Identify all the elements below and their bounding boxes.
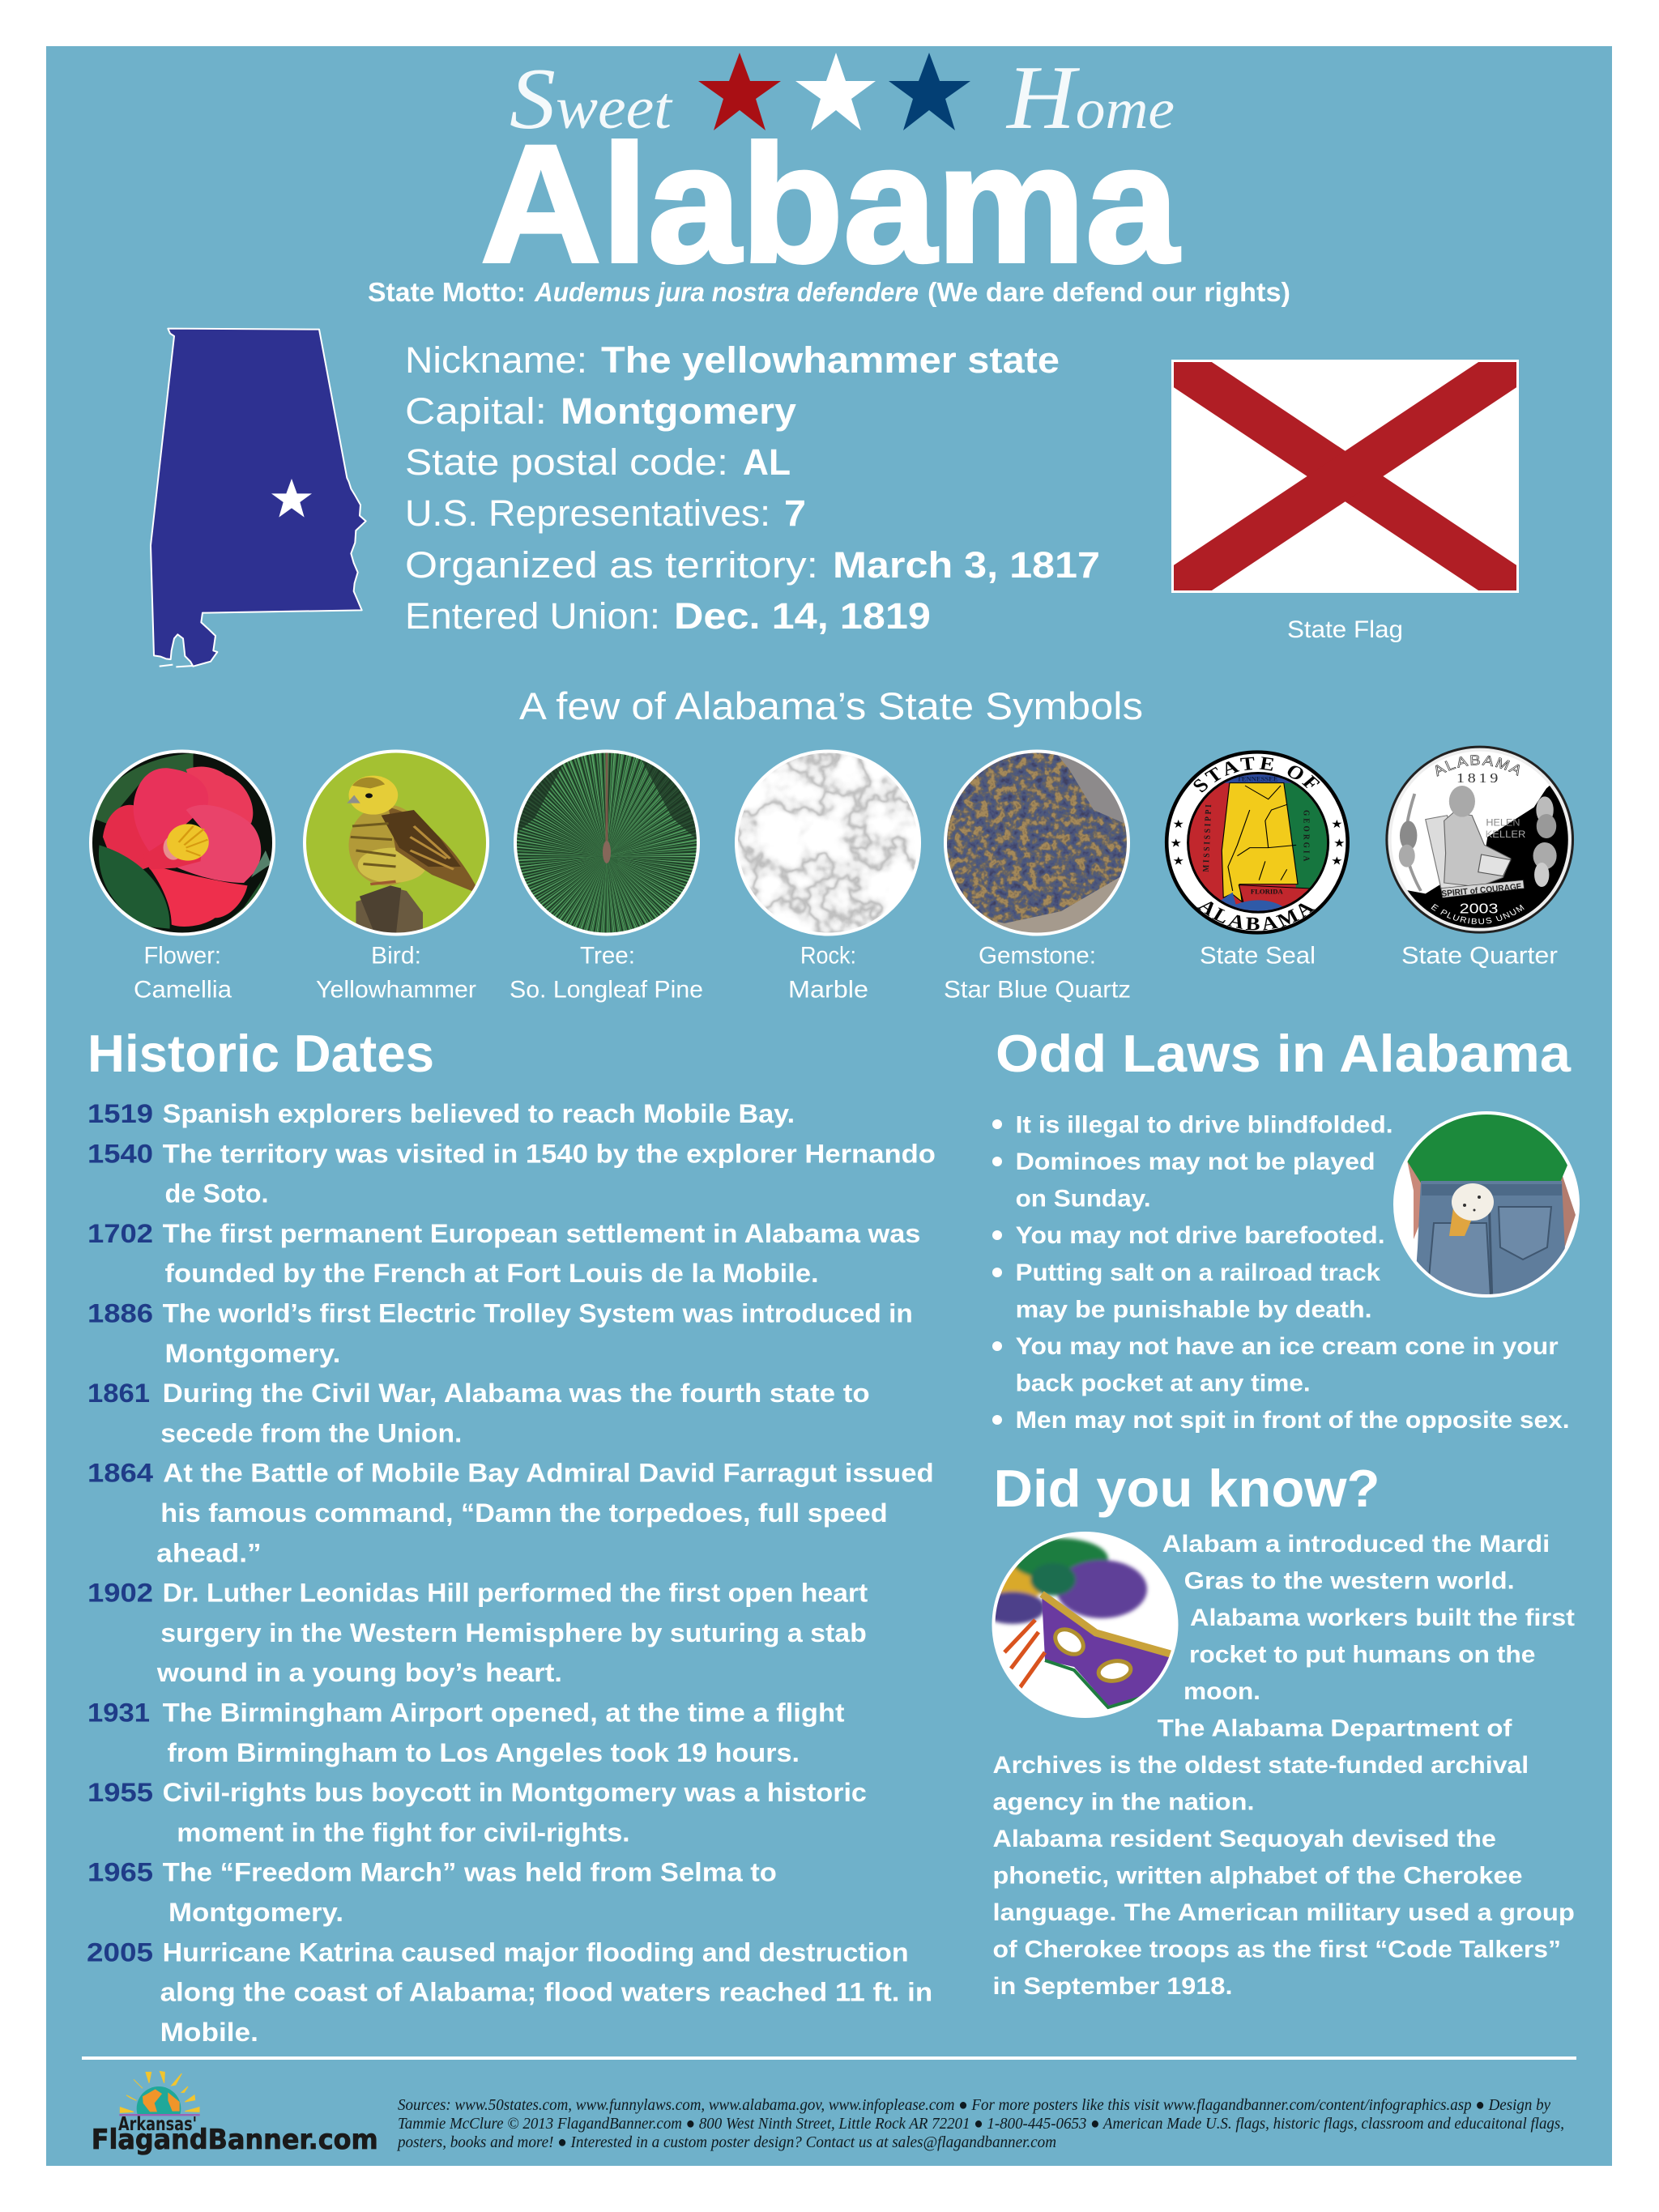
symbol: state quarter: 1819 xyxy=(1456,770,1501,786)
text: state motto: State Motto: xyxy=(368,277,526,307)
map: Alabama state outline xyxy=(151,329,366,667)
entry: 1540: The territory was visited in 1540 by the explorer Hernando xyxy=(163,1139,936,1168)
text: Sweet: Sweet xyxy=(510,51,674,147)
fact: postal code: State postal code: xyxy=(405,441,728,483)
list: odd laws bullets: on Sunday. xyxy=(1016,1186,1151,1213)
captions: state symbols: Marble xyxy=(788,977,868,1003)
captions: state symbols: State Seal xyxy=(1200,943,1316,969)
icon: white star xyxy=(795,53,876,130)
entry: 1864: At the Battle of Mobile Bay Admiral David Farragut issued xyxy=(163,1459,934,1488)
fact: capital: Montgomery xyxy=(561,390,796,432)
entry: 1702: 1702 xyxy=(87,1219,153,1248)
fact: organized as territory: Organized as territory: xyxy=(405,544,818,586)
entry: 1886: The world’s first Electric Trolley System was introduced in xyxy=(163,1299,913,1328)
entry: 2005: 2005 xyxy=(87,1937,153,1967)
symbol: state seal: ★ xyxy=(1333,837,1346,850)
symbol: state quarter: HELEN xyxy=(1486,816,1520,828)
entry: 1861 xyxy=(87,1379,870,1447)
heading: state symbols: A few of Alabama’s State Symbols xyxy=(519,684,1143,727)
list: odd laws bullets: You may not drive barefooted. xyxy=(1016,1222,1385,1249)
text block: did you know facts: agency in the nation. xyxy=(993,1788,1254,1816)
captions: state symbols: Star Blue Quartz xyxy=(944,977,1131,1003)
text block: did you know facts: Alabam a introduced the Mardi xyxy=(1162,1531,1550,1558)
symbol: yellowhammer bird photo xyxy=(303,749,489,937)
flag: Alabama state flag xyxy=(1171,360,1519,593)
entry: 1931: from Birmingham to Los Angeles took 19 hours. xyxy=(167,1738,800,1767)
symbol: state seal: GEORGIA xyxy=(1302,810,1311,862)
logo: Arkansas' FlagandBanner.com: Arkansas' xyxy=(118,2114,197,2135)
symbol: state seal: ★ xyxy=(1331,855,1342,867)
text block: did you know facts: phonetic, written alphabet of the Cherokee xyxy=(993,1863,1523,1889)
entry: 1955: 1955 xyxy=(87,1778,153,1807)
symbol: state seal: FLORIDA xyxy=(1251,888,1283,895)
symbol: state seal: ★ xyxy=(1173,855,1184,867)
text block: did you know facts: language. The American military used a group xyxy=(993,1899,1575,1926)
entry: 1955: moment in the fight for civil-rights. xyxy=(177,1818,630,1847)
entry: 1965: 1965 xyxy=(87,1858,153,1887)
list: odd laws bullets: Men may not spit in front of the opposite sex. xyxy=(1016,1407,1570,1434)
text block: did you know facts: in September 1918. xyxy=(993,1973,1233,2000)
entry: 1931 xyxy=(87,1698,845,1767)
symbol: state quarter: 2003 xyxy=(1460,901,1498,917)
heading: historic dates: Historic Dates xyxy=(87,1024,434,1083)
captions: state symbols: Camellia xyxy=(134,977,232,1003)
list: odd laws bullets: back pocket at any time. xyxy=(1016,1370,1311,1397)
captions: state symbols: Flower: xyxy=(144,943,221,969)
symbol: state quarter: E PLURIBUS UNUM xyxy=(1431,904,1525,924)
panel: did you know xyxy=(979,1459,1575,2000)
entry: 1886: Montgomery. xyxy=(165,1339,340,1368)
symbol: longleaf pine photo xyxy=(510,749,705,937)
title: Sweet Home with three stars xyxy=(510,48,1175,148)
entry: 1861: 1861 xyxy=(87,1379,150,1408)
text block: did you know facts: rocket to put humans on the xyxy=(1189,1641,1536,1669)
entry: 2005: Hurricane Katrina caused major flooding and destruction xyxy=(163,1937,909,1967)
entry: 1702: founded by the French at Fort Louis de la Mobile. xyxy=(165,1259,819,1288)
icon: capital star xyxy=(271,479,312,518)
heading: odd laws: Odd Laws in Alabama xyxy=(996,1024,1572,1083)
text: state motto: (We dare defend our rights) xyxy=(928,277,1290,307)
captions: state symbols: Rock: xyxy=(800,943,856,969)
symbol: state quarter xyxy=(1385,745,1575,934)
symbol: state quarter: SPIRIT of COURAGE xyxy=(1441,882,1523,899)
entry: 1519: 1519 xyxy=(87,1099,153,1128)
photo: ice cream cone in back pocket xyxy=(1393,1111,1580,1304)
text block: sources and credits: posters, books and more! ● Interested in a custom poster design? Contact us at sales@flagandbanner.com xyxy=(396,2133,1056,2151)
entry: 1955 xyxy=(87,1778,867,1847)
fact: entered union xyxy=(405,595,931,637)
list: odd laws bullets: It is illegal to drive blindfolded. xyxy=(1016,1111,1393,1138)
symbol: state quarter: ALABAMA xyxy=(1435,755,1520,777)
symbol: camellia flower photo xyxy=(89,749,275,937)
entry: 1864: 1864 xyxy=(87,1459,153,1488)
captions: state symbols: Gemstone: xyxy=(979,943,1096,969)
entry: 1540: 1540 xyxy=(87,1139,153,1168)
captions: state symbols: State Quarter xyxy=(1401,943,1558,969)
symbol: state seal: ★ xyxy=(1173,818,1184,831)
text: state motto: Audemus jura nostra defendere xyxy=(534,277,919,307)
fact: entered union: Dec. 14, 1819 xyxy=(674,595,931,637)
entry: 1861: secede from the Union. xyxy=(160,1418,462,1447)
text block: did you know facts: moon. xyxy=(1183,1678,1260,1705)
entry: 1861: During the Civil War, Alabama was the fourth state to xyxy=(163,1379,870,1408)
title: Alabama: Alabama xyxy=(480,110,1180,297)
fact: entered union: Entered Union: xyxy=(405,595,660,637)
entry: 1702: The first permanent European settlement in Alabama was xyxy=(163,1219,920,1248)
panel: odd laws xyxy=(992,1024,1580,1434)
text block: sources and credits: Tammie McClure © 2013 FlagandBanner.com ● 800 West Ninth Street, Little Rock AR 72201 ● 1-800-445-0653 ● American Made U.S. flags, historic flags, classroom and educaitonal flags, xyxy=(398,2115,1564,2133)
icon: navy star xyxy=(889,53,970,130)
symbol: state seal: MISSISSIPPI xyxy=(1201,804,1213,872)
captions: state symbols: So. Longleaf Pine xyxy=(510,977,703,1003)
heading: did you know: Did you know? xyxy=(993,1459,1380,1518)
list: odd laws bullets: You may not have an ice cream cone in your xyxy=(1016,1333,1559,1360)
text block: sources and credits: Sources: www.50states.com, www.funnylaws.com, www.alabama.gov, www.infoplease.com ● For more posters like this visit www.flagandbanner.com/content/infographics.asp ● Design by xyxy=(398,2096,1550,2114)
fact: capital: Capital: xyxy=(405,390,547,432)
entry: 1902: surgery in the Western Hemisphere by suturing a stab xyxy=(160,1618,867,1647)
photo: mardi gras mask xyxy=(979,1531,1179,1719)
caption: state flag: State Flag xyxy=(1287,616,1403,643)
entry: 2005: Mobile. xyxy=(160,2018,258,2047)
fact: nickname: The yellowhammer state xyxy=(601,339,1060,381)
entry: 1902: 1902 xyxy=(87,1579,153,1608)
entry: 1965 xyxy=(87,1858,777,1927)
icon: sun and globe xyxy=(119,2070,200,2116)
entry: 1902 xyxy=(87,1579,868,1687)
list: odd laws bullets: may be punishable by death. xyxy=(1016,1296,1372,1323)
symbol: state quarter: KELLER xyxy=(1486,829,1525,840)
entry: 1864: his famous command, “Damn the torpedoes, full speed xyxy=(160,1498,888,1528)
symbol: marble photo xyxy=(736,750,922,938)
text block: did you know facts: of Cherokee troops as the first “Code Talkers” xyxy=(993,1936,1561,1963)
panel: historic dates xyxy=(87,1024,936,2047)
fact: organized as territory: March 3, 1817 xyxy=(833,544,1100,586)
logo: Arkansas' FlagandBanner.com xyxy=(92,2071,378,2156)
text block: did you know facts: The Alabama Department of xyxy=(1158,1715,1513,1741)
text block: did you know facts: Alabama resident Sequoyah devised the xyxy=(993,1826,1496,1852)
entry: 1864: ahead.” xyxy=(156,1538,262,1567)
text block: state facts xyxy=(405,339,1100,637)
list: odd laws bullets xyxy=(992,1111,1570,1434)
symbol: state seal: STATE OF xyxy=(1194,757,1320,792)
entry: 1519: Spanish explorers believed to reach Mobile Bay. xyxy=(163,1099,795,1128)
symbol: state seal: TENNESSEE xyxy=(1237,776,1278,783)
fact: capital xyxy=(405,390,796,432)
text block: sources and credits xyxy=(396,2096,1564,2151)
captions: state symbols: Bird: xyxy=(371,943,421,969)
symbol: state seal xyxy=(1165,750,1350,935)
text block: did you know facts: Gras to the western world. xyxy=(1184,1568,1515,1594)
text: state motto xyxy=(368,277,1290,307)
captions: state symbols xyxy=(134,943,1558,1003)
entry: 1931: 1931 xyxy=(87,1698,150,1727)
entry: 2005: along the coast of Alabama; flood waters reached 11 ft. in xyxy=(160,1978,932,2007)
text block: did you know facts: Alabama workers built the first xyxy=(1190,1605,1575,1631)
fact: nickname: Nickname: xyxy=(405,339,587,381)
list: odd laws bullets: Putting salt on a railroad track xyxy=(1016,1259,1380,1286)
fact: representatives: U.S. Representatives: xyxy=(405,492,770,534)
fact: nickname xyxy=(405,339,1060,381)
entry: 1702 xyxy=(87,1219,920,1288)
captions: state symbols: Yellowhammer xyxy=(316,977,476,1003)
entry: 1540: de Soto. xyxy=(165,1179,269,1208)
symbol: state seal: ★ xyxy=(1170,837,1182,850)
captions: state symbols: Tree: xyxy=(580,943,635,969)
icon: red star xyxy=(698,53,781,130)
entry: 1864 xyxy=(87,1459,934,1567)
text block: did you know facts xyxy=(993,1531,1575,2000)
symbol: star blue quartz photo xyxy=(945,749,1131,940)
entry: 1931: The Birmingham Airport opened, at the time a flight xyxy=(163,1698,845,1727)
entry: 1902: wound in a young boy’s heart. xyxy=(156,1658,562,1687)
entry: 2005 xyxy=(87,1937,932,2047)
fact: representatives: 7 xyxy=(784,492,806,534)
entry: 1965: The “Freedom March” was held from Selma to xyxy=(163,1858,777,1887)
entry: 1886 xyxy=(87,1299,913,1368)
list: odd laws bullets: Dominoes may not be played xyxy=(1016,1149,1375,1175)
symbol: state seal: ALABAMA xyxy=(1197,901,1315,931)
entry: 1886: 1886 xyxy=(87,1299,153,1328)
text: Home: Home xyxy=(1005,48,1175,148)
entry: 1955: Civil-rights bus boycott in Montgomery was a historic xyxy=(163,1778,867,1807)
fact: organized as territory xyxy=(405,544,1100,586)
fact: postal code: AL xyxy=(743,441,791,483)
logo: Arkansas' FlagandBanner.com: FlagandBanner.com xyxy=(92,2124,378,2156)
entry: 1965: Montgomery. xyxy=(168,1898,343,1927)
symbol: state seal: ★ xyxy=(1331,818,1342,831)
entry: 1902: Dr. Luther Leonidas Hill performed the first open heart xyxy=(163,1579,868,1608)
text block: did you know facts: Archives is the oldest state-funded archival xyxy=(993,1752,1529,1779)
entry: 1540 xyxy=(87,1139,936,1208)
